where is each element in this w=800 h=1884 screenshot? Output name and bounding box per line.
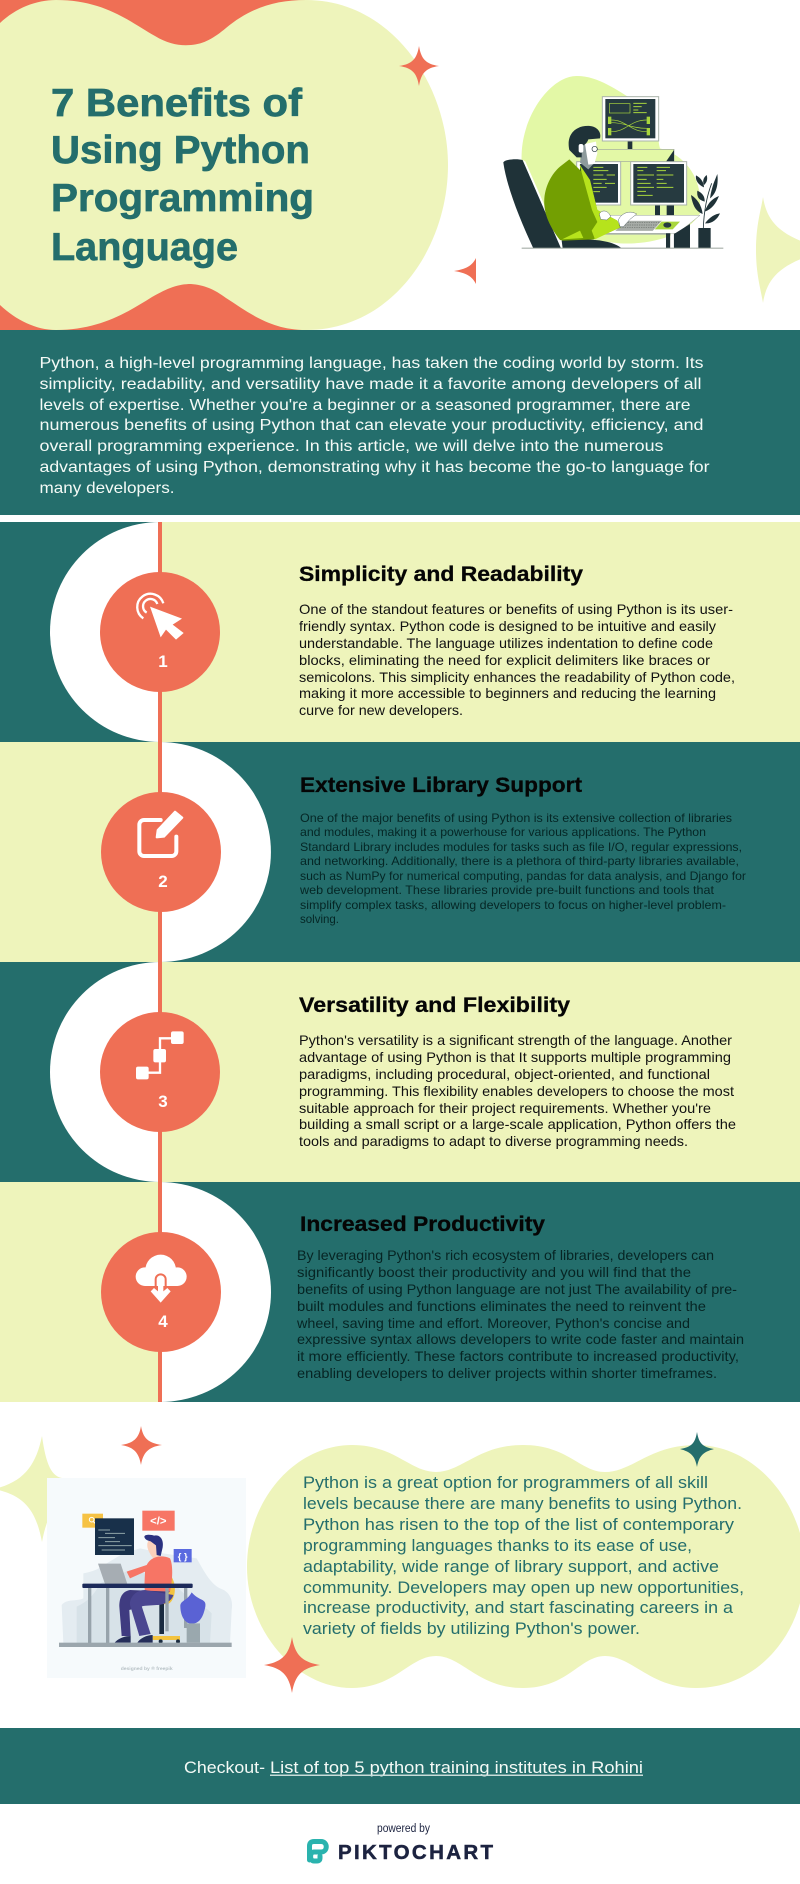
intro text <box>40 355 710 497</box>
intro text: Python, a high-level programming language, has taken the coding world by storm. Its <box>40 355 704 372</box>
panel: conclusion blob <box>247 1445 800 1688</box>
benefit 4 text: significantly boost their productivity and you will find that the <box>297 1265 691 1280</box>
title: 7 Benefits of <box>51 82 303 125</box>
floor line <box>522 248 723 249</box>
stands <box>655 204 660 216</box>
illustration: developer at monitors <box>503 76 723 249</box>
badge 3: flow steps icon and number: 3 <box>158 1092 168 1111</box>
footer link text: Checkout- <box>184 1758 265 1777</box>
man torso <box>544 159 621 241</box>
benefit 4 text: built modules and functions eliminates the need to reinvent the <box>297 1299 706 1314</box>
intro text: simplicity, readability, and versatility have made it a favorite among developers of all <box>40 376 702 393</box>
benefit 4 text: Increased Productivity <box>300 1213 545 1236</box>
braces tag <box>174 1549 192 1562</box>
desk <box>595 215 700 233</box>
title: Language <box>51 226 238 269</box>
benefit 1 text: One of the standout features or benefits of using Python is its user- <box>299 602 733 617</box>
intro text: levels of expertise. Whether you're a beginner or a seasoned programmer, there are <box>40 397 691 414</box>
conclusion text: programming languages thanks to its ease of use, <box>303 1536 692 1555</box>
code tag <box>142 1511 175 1531</box>
benefit 2 text: web development. These libraries provide pre-built functions and tools that <box>299 884 715 897</box>
intro text: advantages of using Python, demonstrating why it has become the go-to language for <box>40 459 710 476</box>
left monitor <box>577 162 621 205</box>
benefit 1 text: semicolons. This simplicity enhances the readability of Python code, <box>299 670 735 685</box>
intro text: numerous benefits of using Python that can elevate your productivity, efficiency, and <box>40 417 704 434</box>
benefit 4 text: benefits of using Python language are not just The availability of pre- <box>297 1282 737 1297</box>
timeline line <box>158 522 162 1402</box>
icon: lime sparkle right edge <box>756 197 800 303</box>
hands <box>599 211 611 220</box>
keyboard <box>615 221 662 231</box>
right monitor <box>631 162 687 205</box>
conclusion text: Python is a great option for programmers of all skill <box>303 1473 708 1492</box>
plant <box>691 174 720 248</box>
benefit 1 text: Simplicity and Readability <box>299 563 583 586</box>
mouse pad <box>655 222 680 229</box>
code window <box>95 1518 134 1555</box>
icon: coral half sparkle <box>454 258 476 284</box>
panel: developer illustration: { } <box>178 1551 188 1561</box>
benefit 1 text: making it more accessible to beginners and reducing the learning <box>299 686 716 701</box>
badge 3: flow steps icon and number <box>100 1012 220 1132</box>
badge 4: cloud download icon and number: 4 <box>158 1312 168 1331</box>
header blob with coral accents <box>0 0 448 330</box>
benefit 4 text <box>296 1213 744 1381</box>
chair <box>151 1577 175 1605</box>
benefit 3 text: Versatility and Flexibility <box>299 994 570 1017</box>
powered by Piktochart logo: powered by <box>377 1823 430 1835</box>
conclusion text: levels because there are many benefits to using Python. <box>303 1494 742 1513</box>
benefit 4 text: enabling developers to deliver projects within shorter timeframes. <box>297 1366 717 1381</box>
panel: developer illustration: designed by ® freepik <box>121 1665 173 1672</box>
icon: lime sparkle left <box>0 1436 84 1542</box>
icon: large coral sparkle <box>264 1637 320 1693</box>
floor <box>59 1643 232 1647</box>
benefit 3 text: programming. This flexibility enables developers to choose the most <box>299 1084 734 1099</box>
chair <box>503 159 562 248</box>
panel: developer illustration <box>47 1478 246 1678</box>
powered by Piktochart logo <box>310 1823 493 1864</box>
benefit 2 text: Standard Library includes modules for tasks such as file I/O, regular expressions, <box>300 841 742 854</box>
benefit 3 text: advantage of using Python is that It supports multiple programming <box>299 1050 731 1065</box>
panel: benefit 1 background <box>0 522 800 742</box>
title <box>51 82 314 269</box>
conclusion text: adaptability, wide range of library support, and active <box>303 1557 719 1576</box>
benefit 3 text: Python's versatility is a significant strength of the language. Another <box>299 1033 732 1048</box>
powered by Piktochart logo: PIKTOCHART <box>338 1841 493 1864</box>
conclusion text: community. Developers may open up new opportunities, <box>303 1578 744 1597</box>
benefit 1 text: blocks, eliminating the need for explicit delimiters like braces or <box>299 653 710 668</box>
footer band <box>0 1728 800 1804</box>
benefit 3 text: tools and paradigms to adapt to diverse programming needs. <box>299 1134 688 1149</box>
plant <box>180 1592 206 1624</box>
icon: teal sparkle <box>680 1432 714 1467</box>
title: Programming <box>51 177 314 220</box>
head <box>580 144 595 169</box>
intro text: many developers. <box>40 480 174 497</box>
intro band <box>0 330 800 515</box>
footer link text: List of top 5 python training institutes in Rohini <box>270 1758 643 1777</box>
search tag <box>82 1514 103 1528</box>
benefit 1 text: friendly syntax. Python code is designed to be intuitive and easily <box>299 619 716 634</box>
background shapes <box>62 1548 232 1643</box>
benefit 2 text: simplify complex tasks, allowing developers to focus on higher-level problem- <box>300 899 726 912</box>
benefit 1 text: understandable. The language utilizes indentation to define code <box>299 636 713 651</box>
benefit 1 text: curve for new developers. <box>299 703 463 718</box>
badge 2: edit icon and number <box>101 792 221 912</box>
badge 1: cursor icon and number <box>100 572 220 692</box>
benefit 2 text <box>299 774 746 926</box>
benefit 3 text: suitable approach for their project requirements. Whether you're <box>299 1101 711 1116</box>
man legs <box>562 239 622 248</box>
intro text: overall programming experience. In this article, we will delve into the numerous <box>40 438 664 455</box>
benefit 3 text: building a small script or a large-scale application, Python offers the <box>299 1117 736 1132</box>
panel: benefit 4 background <box>0 1182 800 1402</box>
benefit 4 text: it more efficiently. These factors contribute to increased productivity, <box>297 1349 739 1364</box>
person <box>147 1538 159 1559</box>
laptop <box>98 1564 127 1584</box>
conclusion text: variety of fields by utilizing Python's power. <box>303 1619 640 1638</box>
benefit 2 text: and modules, making it a powerhouse for various applications. The Python <box>300 826 706 839</box>
benefit 4 text: expressive syntax allows developers to write code faster and maintain <box>297 1332 744 1347</box>
badge 1: cursor icon and number: 1 <box>158 652 168 671</box>
benefit 2 text: Extensive Library Support <box>300 774 582 797</box>
benefit 2 text: One of the major benefits of using Python is its extensive collection of libraries <box>300 812 732 825</box>
badge 2: edit icon and number: 2 <box>158 872 168 891</box>
conclusion text: increase productivity, and start fascinating careers in a <box>303 1598 734 1617</box>
benefit 3 text <box>299 994 736 1149</box>
benefit 1 text <box>299 563 735 718</box>
panel: benefit 3 background <box>0 962 800 1182</box>
panel: benefit 2 background <box>0 742 800 962</box>
badge 4: cloud download icon and number <box>101 1232 221 1352</box>
benefit 3 text: paradigms, including procedural, object-oriented, and functional <box>299 1067 710 1082</box>
conclusion text <box>303 1473 744 1638</box>
title: Using Python <box>51 129 310 172</box>
benefit 2 text: such as NumPy for numerical computing, pandas for data analysis, and Django for <box>300 870 746 883</box>
rear box <box>593 149 674 162</box>
icon: coral sparkle <box>121 1426 162 1465</box>
benefit 4 text: By leveraging Python's rich ecosystem of libraries, developers can <box>297 1248 714 1263</box>
benefit 2 text: solving. <box>300 913 339 926</box>
benefit 2 text: and networking. Additionally, there is a plethora of third-party libraries available, <box>300 855 739 868</box>
conclusion text: Python has risen to the top of the list of contemporary <box>303 1515 735 1534</box>
desk <box>82 1584 193 1588</box>
benefit 4 text: wheel, saving time and effort. Moreover, Python's concise and <box>296 1316 690 1331</box>
top monitor <box>602 97 659 154</box>
icon: coral sparkle top <box>399 46 439 86</box>
panel: developer illustration: </> <box>150 1515 167 1527</box>
